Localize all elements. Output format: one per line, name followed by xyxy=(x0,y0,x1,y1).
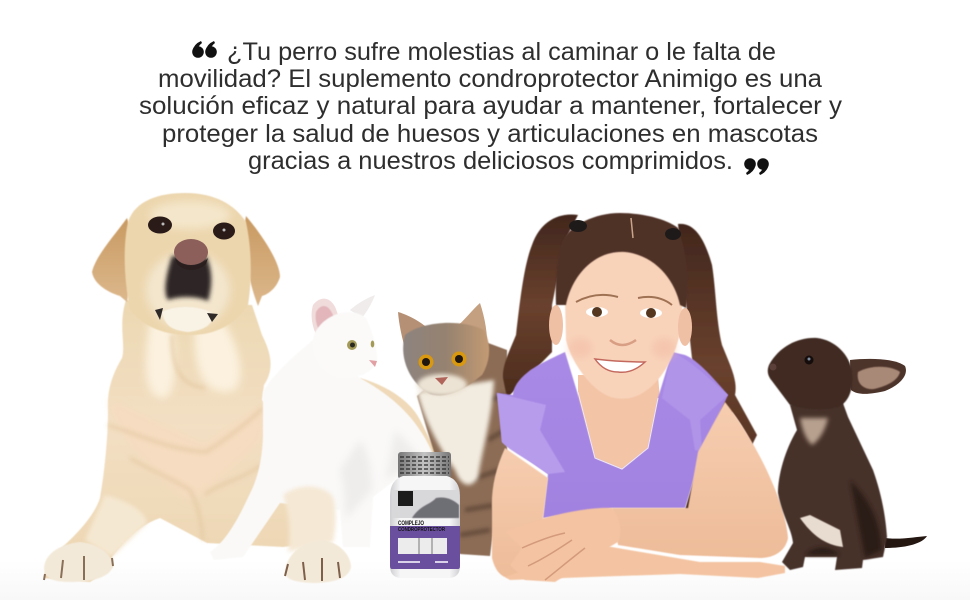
dog leg left xyxy=(85,495,147,557)
quote text block: ¿Tu perro sufre molestias al caminar o le falta de xyxy=(227,38,776,66)
lower forearm xyxy=(505,545,785,580)
head xyxy=(565,250,682,399)
puppy tail xyxy=(885,536,927,548)
dog muzzle xyxy=(146,252,230,328)
illustration: white cat xyxy=(210,295,432,583)
neckline edge xyxy=(578,392,658,469)
tabby body xyxy=(417,340,507,556)
left arm xyxy=(492,448,550,578)
dog peach chest xyxy=(110,400,262,500)
white cat eye xyxy=(347,340,357,350)
dog body xyxy=(44,300,300,582)
dog nose shade xyxy=(175,258,208,270)
puppy nose xyxy=(770,364,776,370)
quote text block: proteger la salud de huesos y articulaciones en mascotas xyxy=(162,120,818,148)
dog chin xyxy=(162,307,214,332)
tabby nose xyxy=(435,377,448,385)
quote text block xyxy=(139,38,843,175)
hair part xyxy=(631,218,633,238)
white cat ears xyxy=(312,299,342,338)
dress ruffle left xyxy=(497,393,565,474)
puppy eye xyxy=(804,356,814,364)
white cat body xyxy=(210,340,432,560)
puppy shading xyxy=(805,480,882,558)
hand xyxy=(505,508,620,582)
right pigtail xyxy=(678,224,757,510)
icon: opening quotation mark xyxy=(192,41,217,58)
dog back strip xyxy=(360,378,436,470)
dress ruffle right xyxy=(662,352,728,452)
illustration: chihuahua puppy xyxy=(768,338,927,570)
band details xyxy=(398,561,448,563)
dog claws left xyxy=(44,556,113,580)
dog head xyxy=(125,193,251,335)
nose xyxy=(610,340,636,345)
tabby ears xyxy=(398,312,432,352)
bottle body xyxy=(390,476,460,578)
puppy belly xyxy=(800,515,843,547)
dog eyes xyxy=(148,216,172,234)
eyes xyxy=(586,307,608,317)
cheeks xyxy=(568,338,592,358)
puppy chest xyxy=(800,418,828,445)
right arm xyxy=(612,402,788,558)
dog ears xyxy=(92,218,132,302)
puppy ear xyxy=(850,359,906,394)
neck and chest xyxy=(578,375,660,469)
hair top xyxy=(556,213,688,308)
illustration: labrador dog xyxy=(44,193,436,582)
dog forehead highlight xyxy=(150,201,230,229)
product title: COMPLEJO xyxy=(398,520,424,527)
label info box xyxy=(398,538,447,554)
quote text block: gracias a nuestros deliciosos comprimidos. xyxy=(248,147,733,175)
white cat nose xyxy=(369,360,377,367)
finger lines xyxy=(522,533,585,580)
floor shadow xyxy=(0,560,970,600)
illustration: tabby cat xyxy=(398,303,507,556)
eyebrows xyxy=(576,295,672,305)
left pigtail xyxy=(503,214,578,398)
brand box xyxy=(398,491,413,506)
tabby chest xyxy=(417,380,494,485)
label info separators xyxy=(419,538,432,554)
tabby head xyxy=(403,323,489,395)
purple band xyxy=(390,526,460,569)
hair ties xyxy=(569,220,587,232)
dog eye highlights xyxy=(162,222,164,226)
white cat shading xyxy=(340,430,420,520)
white cat head xyxy=(313,312,377,378)
product: supplement bottle xyxy=(390,452,460,578)
dog fur folds xyxy=(108,335,263,540)
product subtitle: CONDROPROTECTOR xyxy=(398,527,445,533)
illustration: girl xyxy=(492,213,788,582)
tabby muzzle xyxy=(417,374,467,396)
dog jowl tips xyxy=(155,308,218,322)
dog front paw right xyxy=(285,540,351,583)
girl ears xyxy=(549,305,563,345)
tabby eyes xyxy=(418,354,434,370)
dog dark muzzle xyxy=(165,256,211,301)
quote text block: movilidad? El suplemento condroprotector Animigo es una xyxy=(158,65,822,93)
bottle cap xyxy=(398,452,451,479)
icon: closing quotation mark xyxy=(744,158,769,175)
dress xyxy=(497,352,728,518)
puppy head xyxy=(768,338,852,409)
puppy body xyxy=(778,395,887,570)
smile xyxy=(595,359,645,372)
quote text block: solución eficaz y natural para ayudar a mantener, fortalecer y xyxy=(139,92,843,120)
bottle cap ridges xyxy=(400,457,449,473)
tabby stripes xyxy=(460,395,506,535)
dog chest fur highlights xyxy=(146,320,240,398)
label photo xyxy=(392,490,459,518)
dog nose xyxy=(174,239,208,265)
dog front leg right xyxy=(283,487,336,552)
dog claws right xyxy=(285,558,340,581)
dog front paw left xyxy=(44,542,113,582)
